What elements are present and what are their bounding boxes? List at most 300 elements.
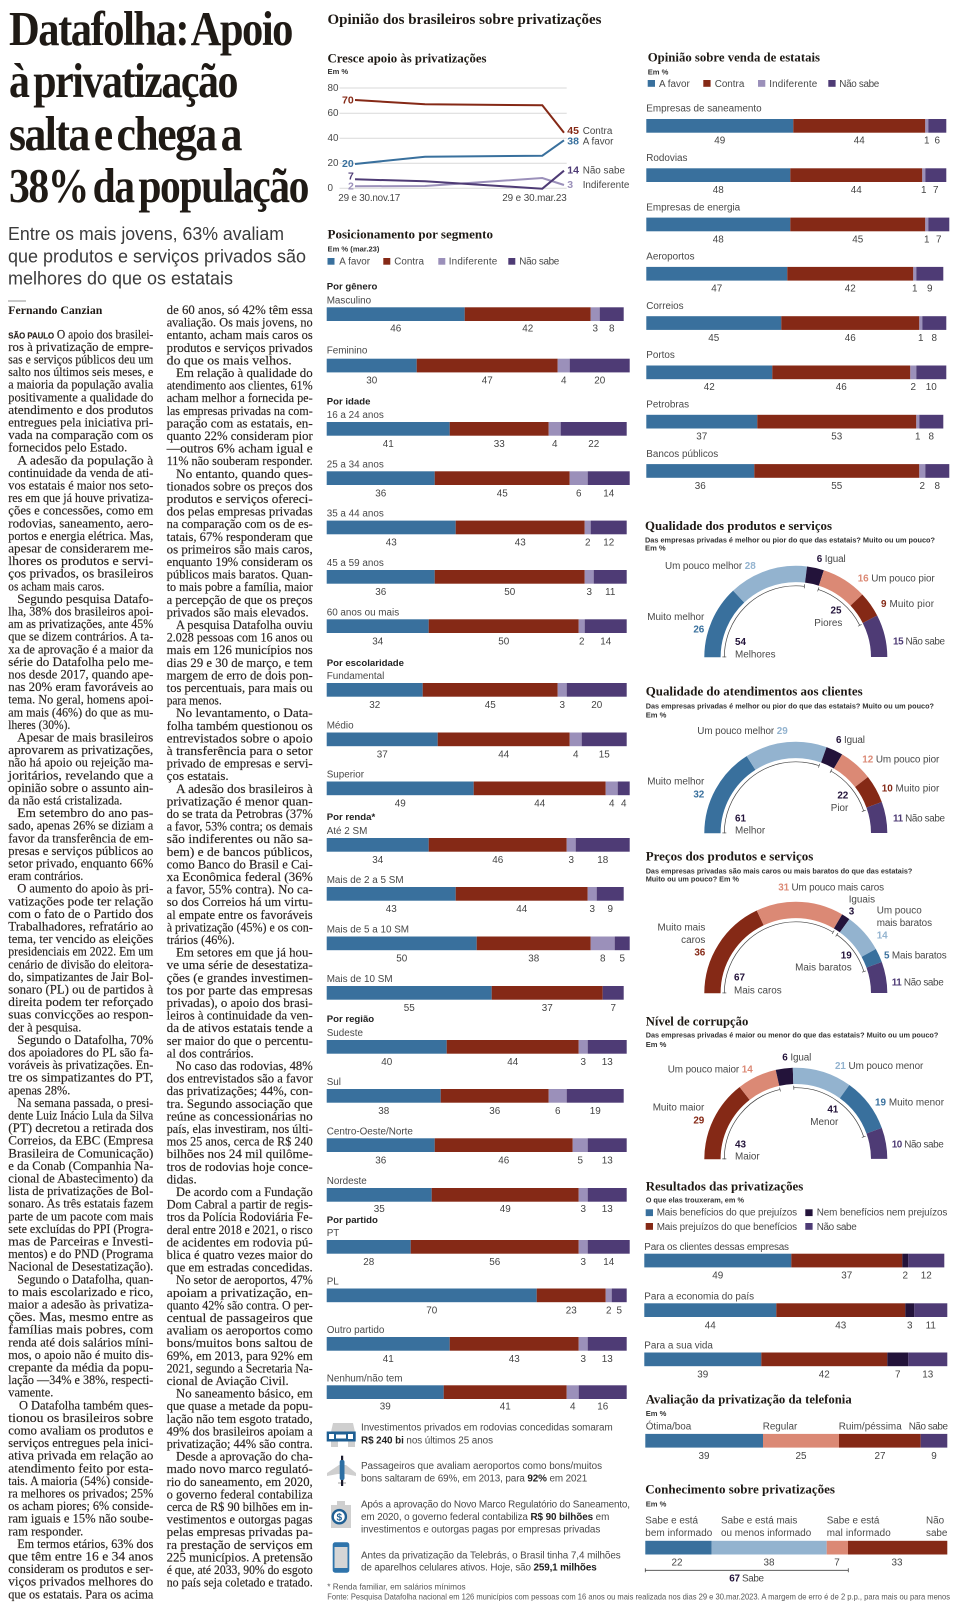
article text column 1: ços privados, os brasileiros [8,567,153,581]
legend [646,1208,947,1233]
panel: quality of products and services: 15 Não sabe [893,636,946,647]
panel: results of privatizations: 11 [926,1320,936,1331]
panel: opinion on sale of state companies: 36 [695,481,706,492]
panel: opinion on sale of state companies: 6 [935,136,941,147]
group: por partido [327,1215,630,1412]
article text column 2: como Banco do Brasil e Cai- [167,857,313,871]
bracket: 67 Sabe: 67 Sabe [729,1574,764,1585]
panel: quality of customer service: Muito melhor [647,777,705,788]
article text column 2: bons/muitos bons saltou de [167,1336,313,1350]
article text column 2: reúne as concessionárias no [167,1109,313,1123]
panel: corruption level: 29 [693,1115,705,1126]
group: por renda: 46 [492,855,504,866]
group: por gênero: 4 [561,376,567,387]
panel: results of privatizations: Para os clientes dessas empresas [644,1242,789,1253]
panel: prices of products and services: caros [681,935,705,946]
legend [648,79,880,90]
panel: results of privatizations: Para a sua vida [644,1341,713,1352]
group: por partido: 39 [380,1401,391,1412]
article text column 1: que têm entre 16 e 34 anos [8,1550,153,1564]
group: por região [327,1014,627,1215]
article text column 2: das privatizações; 44%, con- [167,1084,313,1098]
article text column 1: A adesão da população à [17,453,154,467]
panel: opinion on sale of state companies: 53 [831,431,843,442]
article text column 1: Na semana passada, o presi- [17,1096,153,1110]
panel: telephony privatization evaluation: Regular [763,1422,798,1433]
panel: opinion on sale of state companies: 2 [920,481,925,492]
article text column 2: No levantamento, o Data- [176,706,313,720]
group: por região: 5 [577,1155,583,1166]
article text column 2: atendimento aos clientes, 61% [167,379,313,393]
panel: knowledge about privatizations: Sabe e está mais [721,1515,797,1526]
panel: opinion on sale of state companies: Em % [648,67,669,76]
group: por escolaridade: Por escolaridade [327,658,404,669]
group: por escolaridade: 44 [534,798,546,810]
article text column 2: ve uma série de desestatiza- [167,958,313,972]
article text column 2: trários (46%). [167,933,235,947]
panel: quality of products and services [645,518,946,661]
panel: opinion on sale of state companies: 44 [854,136,865,147]
group: por gênero: Por gênero [327,281,377,292]
article text column 1: sado, apenas 26% se diziam a [8,819,154,833]
panel: opinion on sale of state companies: 48 [713,185,724,196]
group: por partido: 4 [570,1401,576,1412]
group: por escolaridade: 49 [395,798,406,810]
article text column 1: Segundo o Datafolha, quan- [17,1272,153,1286]
panel: quality of products and services: 26 [693,624,705,635]
article text column 2: centual de passageiros que [167,1311,313,1325]
article text column 2: folha também questionou os [167,719,313,733]
panel: opinion on sale of state companies: 1 [924,234,930,245]
group: por idade: 12 [603,538,614,549]
callout: sanitation: em 2020, o governo federal contabiliza R$ 90 bilhões em [361,1512,609,1523]
article text column 1: viços privados melhores do [8,1575,153,1589]
group: por escolaridade: 3 [559,700,565,711]
group: por gênero: Feminino [327,346,368,357]
article text column 1: maior a adesão às privatiza- [8,1298,153,1312]
legend: Mais prejuízos do que benefícios [657,1222,797,1233]
article text column 1: vamente. [8,1386,53,1400]
article text column 1: presas e serviços públicos ao [8,844,153,858]
panel: opinion on sale of state companies: 49 [714,136,726,147]
article text column 2: Em setores em que já hou- [176,946,313,960]
panel: knowledge about privatizations: bem informado [645,1528,713,1539]
article text column 1: suas convicções ao respon- [8,1008,153,1022]
group: por idade: 3 [586,587,592,598]
gauge chart [712,750,879,833]
article text column 1: O Datafolha também ques- [19,1398,153,1412]
panel: quality of products and services: Um pouco melhor 28 [665,561,756,572]
article text column 2: A adesão dos brasileiros à [176,782,313,796]
article text column 1: aprovarem as privatizações, [8,743,153,757]
article text column 1: e da Conab (Companhia Na- [8,1159,153,1173]
panel: quality of customer service: Melhor [735,826,766,837]
article text column 2: de 60 anos, só 42% têm essa [167,303,313,317]
article text column 2: mado novo marco regulató- [167,1462,313,1476]
group: por gênero: 8 [609,324,615,335]
article text column 1: continuidade da venda de ati- [8,466,153,480]
byline: Fernando Canzian [8,304,103,317]
group: por idade: Por idade [327,396,370,407]
panel: line chart support for privatization: 40 [328,133,339,144]
panel: prices of products and services: Das empresas privadas são mais caros ou mais baratos do que das estatais? [646,866,913,875]
panel: prices of products and services: 19 [841,950,852,961]
group: por idade: 6 [576,488,582,499]
group: por gênero: 3 [592,324,598,335]
article text column 1: entregues pela iniciativa pri- [8,416,153,430]
article text column 1: nas 20% eram favoráveis ao [8,680,153,694]
article text column 1: crepante da média da popu- [8,1360,153,1374]
group: por partido: 43 [509,1354,520,1365]
article text column 1: a maioria da população avalia [8,378,154,392]
panel: corruption level: Um pouco maior 14 [668,1064,753,1075]
article text column 2: xa Econômica federal (36% [167,870,313,884]
article text column 2: na comparação com os de es- [167,517,313,531]
article text column 2: bilhões nos 24 mil quilôme- [167,1147,313,1161]
article text column 1: ram responder. [8,1524,83,1538]
article text column 1: ros à privatização de empre- [8,340,153,354]
group: por partido: 3 [580,1354,586,1365]
gauge chart [712,1076,879,1159]
group: por escolaridade: 4 [621,798,627,810]
panel: prices of products and services: 3 [849,907,855,918]
panel: line chart support for privatization: 45 [567,125,579,137]
article text column 1: sonaro (PL) ou de partidos à [8,982,154,996]
group: por idade: 45 a 59 anos [327,558,384,569]
group: por gênero [327,281,630,387]
article text column 1: tre os simpatizantes do PT, [8,1071,153,1085]
panel: corruption level: Das empresas privadas é maior ou menor do que das estatais? Muito ou um pouco? [646,1031,939,1040]
article text column 2: No caso das rodovias, 48% [176,1059,313,1073]
legend: Mais benefícios do que prejuízos [657,1208,797,1219]
article text column 2: vestimentos e outorgas pagas [167,1513,313,1527]
callout: highways: Investimentos privados em rodovias concedidas somaram [361,1423,613,1434]
article text column 2: tros de rodovias hoje conce- [167,1160,313,1174]
group: por escolaridade: 4 [609,798,615,810]
group: por renda: 55 [404,1003,415,1014]
article text column 1: sonaro. As três estatais fazem [8,1197,154,1211]
panel: line chart support for privatization: 70 [342,94,354,106]
group: por gênero: 47 [482,376,493,387]
panel: corruption level: 21 Um pouco menor [835,1061,924,1072]
panel: line chart support for privatization: Indiferente [583,180,630,191]
article text column 1: com o fato de o Partido dos [8,907,153,921]
article text column 2: tos por parte das empresas [167,983,313,997]
article text column 1: os acham piores; 6% conside- [8,1499,153,1513]
article text column 2: a favor, 53% contra; os demais [167,820,313,834]
article text column 1: Segundo pesquisa Datafo- [17,592,153,606]
panel: results of privatizations: 2 [903,1271,908,1282]
panel: prices of products and services: Mais baratos [795,963,852,974]
panel: line chart support for privatization: 29 e 30.mar.23 [502,193,567,204]
article text column 1: tionou os brasileiros sobre [8,1411,154,1425]
panel: results of privatizations: 44 [705,1320,716,1331]
group: por idade: 22 [588,439,599,450]
panel: opinion on sale of state companies: Correios [646,301,684,312]
group: por renda: 50 [396,954,408,964]
article text column 2: ser maior do que o percentu- [167,1034,313,1048]
panel: corruption level: 6 Igual [782,1052,811,1063]
article text column 1: apenas 28%. [8,1083,70,1097]
callout: sanitation: investimentos e outorgas pagas por empresas privadas [361,1525,600,1536]
panel: quality of products and services: 25 [831,605,842,616]
panel: corruption level: Em % [646,1040,667,1049]
group: por escolaridade: 44 [498,750,510,760]
panel: opinion on sale of state companies: 1 [918,333,924,344]
panel: knowledge about privatizations: 7 [834,1558,840,1569]
article text column 1: tema, ter vencido as eleições [8,932,153,946]
article text column 2: deral entre 2018 e 2021, o risco [167,1223,313,1237]
article text column 1: serviços entregues pela inici- [8,1436,153,1450]
bracket: 67 Sabe [645,1568,848,1585]
group: por idade: 34 [372,636,384,647]
group: por renda: 5 [619,954,625,964]
article text column 2: al empate entre os favoráveis [167,908,313,922]
article text column 2: didas. [167,1172,197,1186]
article text column 1: xa de aprovação é a maior da [8,642,154,656]
group: por partido: 13 [602,1354,613,1365]
panel: line chart support for privatization: 3 [567,179,573,191]
article text column 2: No saneamento básico, em [176,1387,313,1401]
panel: knowledge about privatizations: 33 [892,1558,903,1569]
panel: opinion on sale of state companies: 44 [851,185,862,196]
group: por idade: 14 [603,488,615,499]
article text column 1: atendimento feito por esta- [8,1461,153,1475]
panel: quality of customer service: 61 [735,814,746,825]
article text column 2 [166,303,314,1590]
group: por gênero: 20 [594,376,606,387]
legend [328,257,560,268]
footnote and source [327,1582,950,1601]
infographic heading: Opinião dos brasileiros sobre privatizações [328,12,602,28]
panel: quality of products and services: Piores [814,618,842,629]
panel: opinion on sale of state companies: 9 [927,284,933,295]
article text column 2: a percepção de que os preços [167,593,313,607]
group: por partido: 56 [489,1257,501,1268]
legend: Contra [715,79,745,90]
group: por idade: 14 [600,636,612,647]
panel: results of privatizations: 43 [835,1320,847,1331]
title: 38% da população [9,158,308,213]
panel: line chart support for privatization: Não sabe [583,166,625,177]
article text column 1: (PT) decretou a retirada dos [8,1121,153,1135]
group: por escolaridade: 4 [573,750,579,760]
panel: quality of products and services: Melhores [735,650,776,661]
group: por região: 49 [500,1204,511,1215]
group: por idade: 43 [386,538,397,549]
panel: prices of products and services: Iguais [849,894,875,905]
group: por renda: 9 [607,904,613,915]
legend: Contra [394,257,424,268]
legend: Não sabe [817,1222,857,1233]
article text column 2: tatais, 67% responderam que [167,530,313,544]
group: por região: 38 [378,1106,390,1117]
group: por renda: 43 [386,904,397,915]
article text column 1: renda até dois salários míni- [8,1335,153,1349]
article text column 2: mais em 126 municípios nos [167,643,313,657]
panel: quality of customer service: 32 [693,789,705,800]
panel: line chart support for privatization: 0 [328,183,334,194]
article text column 2: No entanto, quando ques- [176,467,313,481]
group: por região: 36 [375,1155,387,1166]
article text column 2: privatização é menor quan- [167,794,313,808]
article text column 2: são indiferentes ou não sa- [167,832,313,846]
article text column 2: que quase a metade da popu- [167,1399,313,1413]
group: por idade: 16 a 24 anos [327,410,384,421]
article text column 2: las empresas privadas na com- [167,404,313,418]
article text column 2: margem de erro de dois pon- [167,668,313,682]
group: por partido: 23 [566,1306,577,1316]
group: por partido: 14 [603,1257,615,1268]
article text column 1: lação —34% e 38%, respecti- [8,1373,153,1387]
article text column 1: os acham mais caros. [8,579,104,593]
panel: quality of customer service: Pior [831,803,849,814]
group: por região: 3 [580,1204,586,1215]
panel: corruption level: Muito maior [653,1103,705,1114]
panel: quality of products and services: Qualidade dos produtos e serviços [645,518,832,533]
group: por idade: 33 [494,439,505,450]
group: por partido: PL [327,1276,339,1288]
panel: prices of products and services: 31 Um pouco mais caros [778,882,884,893]
article text column 2: Dom Cabral a partir de regis- [167,1198,313,1212]
article text column 1: joritários, revelando que a [7,768,154,782]
article text column 1: Nacional de Desestatização). [8,1260,153,1274]
group: por renda: 7 [610,1003,616,1014]
article text column 1: Brasileira de Comunicação) [8,1146,153,1160]
article text column 1 [7,327,154,1601]
panel: position by segment: Posicionamento por segmento [328,227,493,242]
article text column 2: no país seja coletado e tratado. [167,1576,313,1590]
article text column 2: do se trata da Petrobras (37% [167,807,313,821]
panel: opinion on sale of state companies: 37 [696,431,707,442]
article text column 2: 2021, segundo a Secretaria Na- [167,1361,313,1375]
article text column 2: quanto 42% são contra. O per- [167,1298,313,1312]
panel: opinion on sale of state companies: 55 [831,481,843,492]
panel: line chart support for privatization [328,50,630,204]
panel: prices of products and services: 36 [694,948,706,959]
legend: A favor [339,257,371,268]
article text column 1: cional de Abastecimento) da [8,1172,154,1186]
group: por região: 44 [507,1057,519,1068]
panel: knowledge about privatizations: Não [926,1515,945,1526]
group: por idade: 36 [375,488,387,499]
panel: line chart support for privatization: Em % [328,67,348,76]
panel: knowledge about privatizations: Sabe e está [645,1515,699,1526]
panel: knowledge about privatizations [645,1481,948,1585]
article text column 2: entrevistados sobre o apoio [167,731,313,745]
group: por idade: 50 [498,636,510,647]
group: por partido: 5 [616,1306,622,1316]
panel: opinion on sale of state companies: 1 [915,431,921,442]
panel: telephony privatization evaluation: Avaliação da privatização da telefonia [646,1392,852,1407]
panel: results of privatizations: 12 [921,1271,932,1282]
group: por renda: 3 [589,904,595,915]
panel: opinion on sale of state companies: 47 [711,284,722,295]
panel: prices of products and services: mais baratos [877,918,932,929]
icon: airplane [327,1456,356,1486]
article text column 1: cenário de divisão do eleitora- [8,957,153,971]
panel: telephony privatization evaluation: Ótima/boa [646,1422,692,1433]
article text column 2: quanto 22% consideram pior [167,429,314,443]
article text column 1: ra melhores os privados; 25% [8,1486,153,1500]
article text column 2: entanto, acham mais caros os [167,328,313,342]
article text column 1: sete excluídas do PPI (Progra- [8,1222,153,1236]
group: por idade: 60 anos ou mais [327,607,399,618]
article text column 1: rodovias, saneamento, aero- [8,516,153,530]
article text column 1: vos estatais é maior nos seto- [8,478,153,492]
panel: telephony privatization evaluation: Em % [646,1409,667,1418]
title [9,1,308,213]
article text column 1: que os estatais. Para os acima [8,1587,154,1601]
panel: prices of products and services [646,849,947,997]
group: por gênero: 46 [390,324,402,335]
panel: line chart support for privatization: 20 [342,158,354,170]
panel: position by segment: Em % (mar.23) [328,245,380,254]
group: por escolaridade [327,658,630,810]
group: por gênero: Masculino [327,295,372,306]
panel: line chart support for privatization: 80 [328,83,339,94]
article text column 2: A pesquisa Datafolha ouviu [176,618,313,632]
panel: corruption level: Nível de corrupção [646,1014,748,1029]
article text column 2: apoiam a privatização, en- [167,1286,313,1300]
legend: Não sabe [519,257,560,268]
article text column 2: é que, até 2033, 90% do esgoto [167,1563,313,1577]
panel: quality of customer service [646,684,946,837]
group: por idade: 35 a 44 anos [327,509,384,520]
panel: telephony privatization evaluation [645,1392,948,1462]
group: por partido: PT [327,1228,339,1239]
group: por partido: Nenhum/não tem [327,1373,402,1384]
panel: opinion on sale of state companies: Bancos públicos [646,449,718,460]
legend: Nem benefícios nem prejuízos [817,1208,947,1219]
panel: opinion on sale of state companies: Rodovias [646,153,688,164]
panel: position by segment [327,227,630,1412]
article text column 1: positivamente a qualidade do [8,390,153,404]
icon: road vehicle [327,1423,356,1447]
group: por idade [327,396,630,647]
article text column 2: avaliam os aeroportos como [167,1324,313,1338]
group: por região: Sudeste [327,1028,363,1039]
panel: opinion on sale of state companies: 10 [926,382,937,393]
panel: opinion on sale of state companies: 8 [932,333,938,344]
legend: A favor [659,79,690,90]
article text column 1: vada na comparação com os [8,428,153,442]
article text column 1: ativa privada em relação ao [8,1449,153,1463]
panel: line chart support for privatization: 2 [348,180,354,192]
group: por região: 35 [374,1204,385,1215]
panel: line chart support for privatization: 14 [567,165,579,177]
panel: prices of products and services: Preços dos produtos e serviços [646,849,813,864]
article text column 2: à transferência para o setor [167,744,314,758]
article text column 2: so dos Correios há um virtu- [167,895,313,909]
article text column 2: —outros 6% acham igual e [166,442,313,456]
group: por idade: 4 [552,439,558,450]
article text column 1: am as privatizações, ante 45% [8,617,153,631]
panel: corruption level: 41 [827,1104,839,1115]
article text column 1: voráveis às privatizações. En- [8,1058,153,1072]
callout: telephony: Antes da privatização da Telebrás, o Brasil tinha 7,4 milhões [361,1550,621,1561]
panel: quality of products and services: 16 Um pouco pior [858,573,935,584]
group: por idade: 11 [605,587,616,598]
article text column 2: públicos mais baratos. Quan- [167,568,313,582]
article text column 2: privadas), o apoio dos brasi- [167,996,313,1010]
article text column 2: De acordo com a Fundação [176,1185,313,1199]
callout: telephony [361,1550,621,1574]
panel: opinion on sale of state companies: 8 [935,481,941,492]
panel: quality of customer service: Qualidade do atendimentos aos clientes [646,684,863,699]
panel: results of privatizations: O que elas trouxeram, em % [646,1196,744,1205]
group: por região: 46 [498,1155,510,1166]
